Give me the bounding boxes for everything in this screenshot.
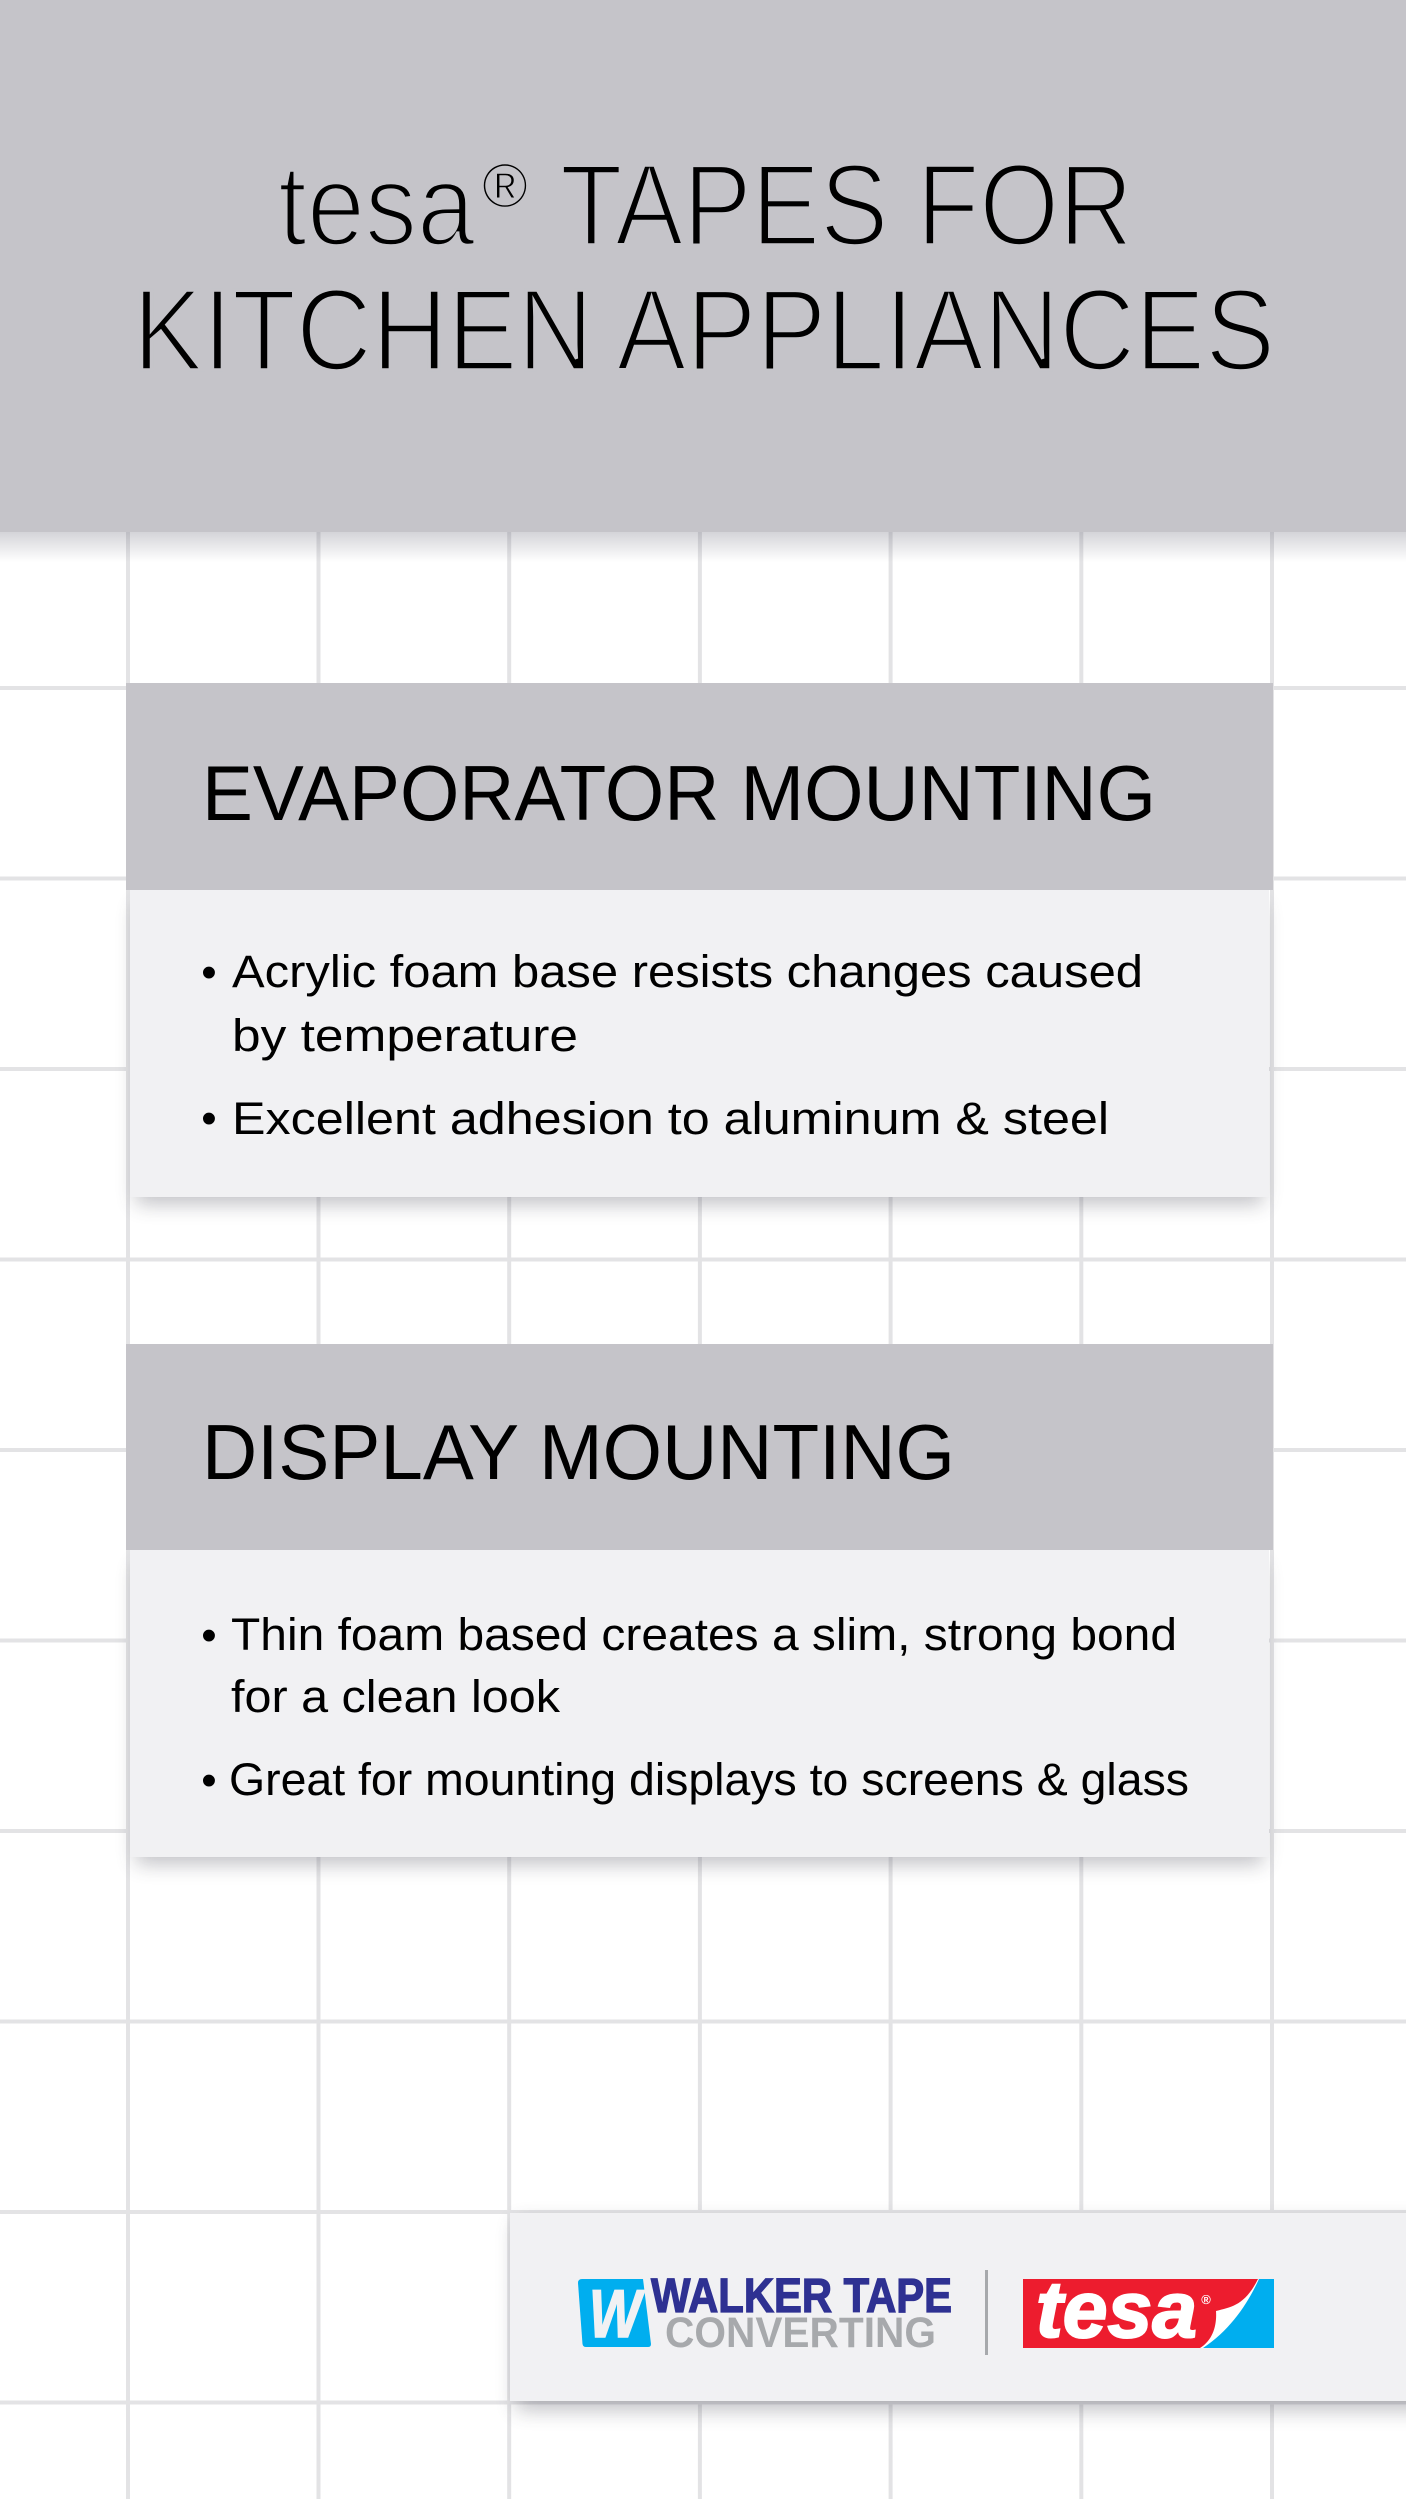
- logo: tesa: ®: [1201, 2292, 1211, 2307]
- panel: evaporator mounting: [126, 683, 1273, 1197]
- panel body: display bullets: Great for mounting displays to screens & glass: [229, 1754, 1189, 1805]
- panel heading: evaporator: [126, 683, 1273, 890]
- panel body: evaporator bullets: •: [201, 1094, 217, 1143]
- title text: tesa: [278, 140, 475, 270]
- panel body: evaporator bullets: by temperature: [232, 1010, 578, 1061]
- panel heading: display: [126, 1344, 1273, 1550]
- panel body: display bullets: •: [201, 1756, 217, 1805]
- logo: tesa: tesa: [1036, 2265, 1197, 2354]
- panel body: display bullets: Thin foam based creates a slim, strong bond: [231, 1609, 1177, 1660]
- logo: Walker Tape Converting: CONVERTING: [665, 2309, 936, 2357]
- panel: display mounting: [126, 1344, 1273, 1857]
- title banner: [0, 0, 1406, 532]
- panel body: evaporator bullets: Excellent adhesion to aluminum & steel: [232, 1093, 1109, 1144]
- logo: tesa: [1023, 2265, 1274, 2354]
- panel body: display bullets: [130, 1550, 1269, 1857]
- panel body: display bullets: •: [201, 1611, 217, 1660]
- panel heading: evaporator: EVAPORATOR MOUNTING: [202, 749, 1156, 837]
- title text: [133, 140, 1275, 395]
- registered mark in title: ®: [482, 152, 528, 221]
- logo: Walker Tape Converting: WALKER TAPE: [651, 2270, 952, 2323]
- panel heading: display: DISPLAY MOUNTING: [202, 1408, 955, 1496]
- panel body: evaporator bullets: •: [201, 948, 217, 997]
- title text: KITCHEN APPLIANCES: [133, 265, 1275, 395]
- panel body: evaporator bullets: [130, 890, 1269, 1197]
- logo: Walker Tape Converting: [578, 2270, 952, 2357]
- footer panel: logos: [510, 2213, 1406, 2401]
- icon: W badge: W: [589, 2276, 646, 2352]
- title text: TAPES FOR: [560, 140, 1133, 270]
- panel body: evaporator bullets: Acrylic foam base resists changes caused: [232, 946, 1143, 997]
- panel body: display bullets: for a clean look: [231, 1671, 561, 1722]
